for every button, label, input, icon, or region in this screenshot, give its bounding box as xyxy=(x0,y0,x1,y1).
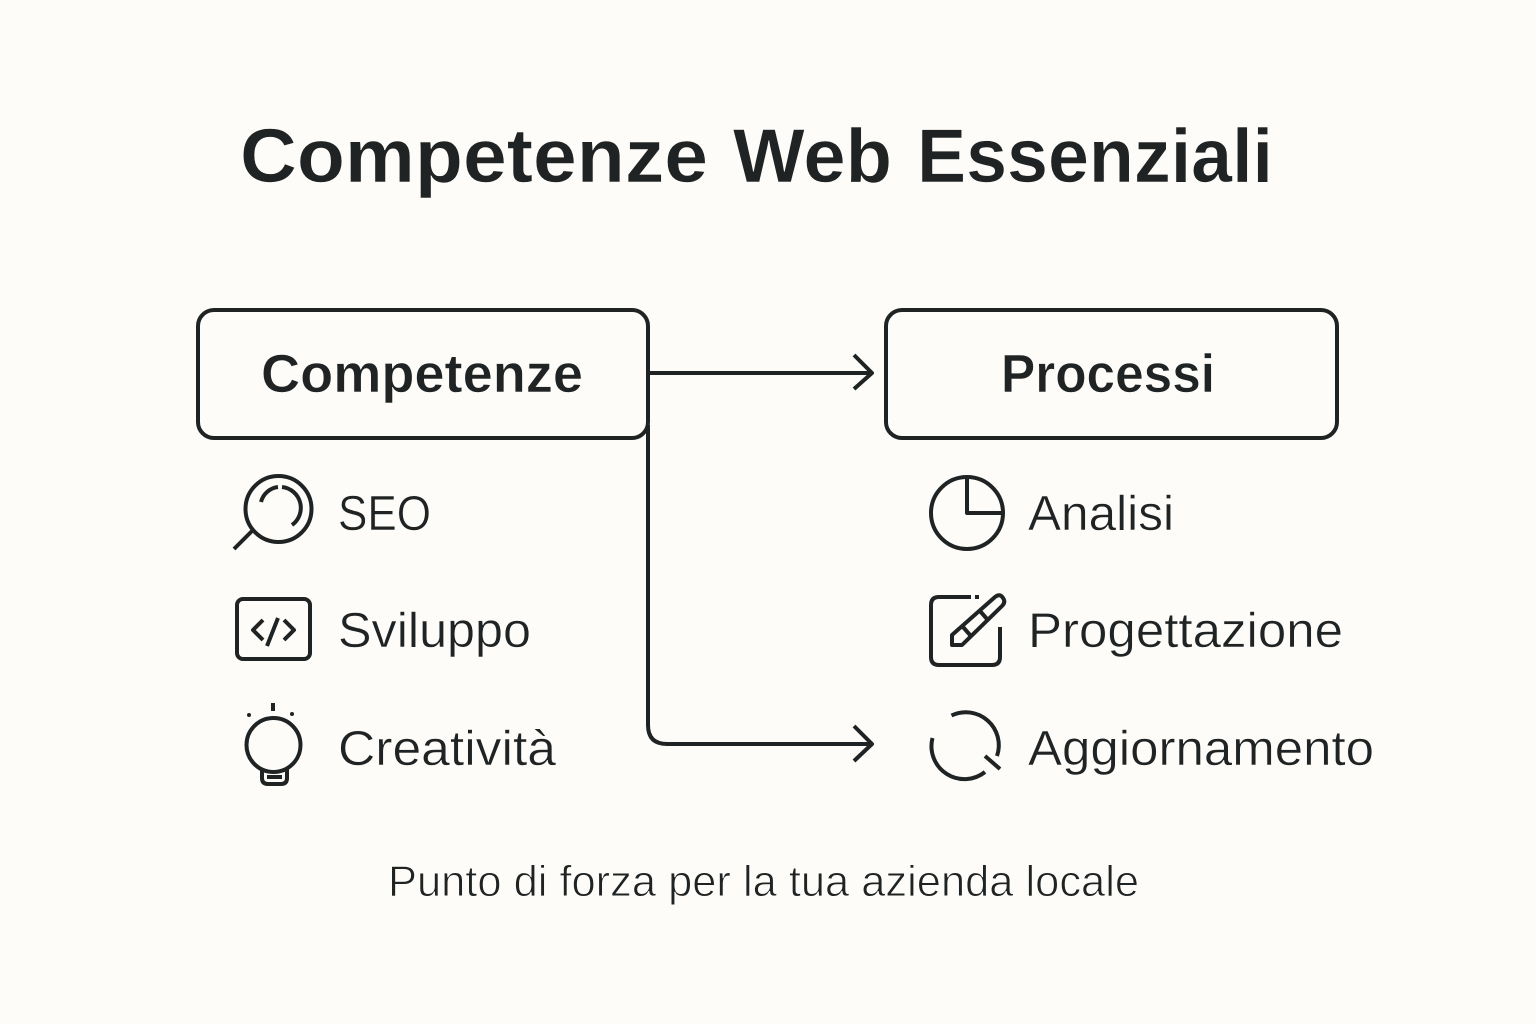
panel: Competenze heading box xyxy=(198,310,648,438)
title: Web xyxy=(733,114,892,199)
arrow: Competenze to Aggiornamento xyxy=(648,425,872,761)
arrow: Competenze to Processi xyxy=(648,355,872,389)
title xyxy=(240,114,1273,199)
icon: light bulb xyxy=(246,703,300,784)
title: Essenziali xyxy=(917,114,1273,199)
label: Aggiornamento: Aggiornamento xyxy=(1028,722,1374,776)
label: SEO: SEO xyxy=(338,487,431,541)
icon: pencil and square xyxy=(931,595,1004,665)
panel: Processi heading box xyxy=(886,310,1337,438)
panel: Competenze heading box: Competenze xyxy=(261,344,583,404)
icon: pie chart xyxy=(931,477,1003,549)
label: Analisi: Analisi xyxy=(1028,487,1174,541)
icon: code window xyxy=(237,599,310,659)
caption: Punto di forza per la tua azienda locale xyxy=(388,857,1139,906)
label: Progettazione: Progettazione xyxy=(1028,604,1343,658)
icon: refresh cycle xyxy=(931,712,1000,779)
icon: SEO magnifier xyxy=(234,476,312,549)
label: Sviluppo: Sviluppo xyxy=(338,604,531,658)
panel: Processi heading box: Processi xyxy=(1001,344,1215,404)
label: Creatività: Creatività xyxy=(338,722,557,776)
title: Competenze xyxy=(240,114,708,199)
